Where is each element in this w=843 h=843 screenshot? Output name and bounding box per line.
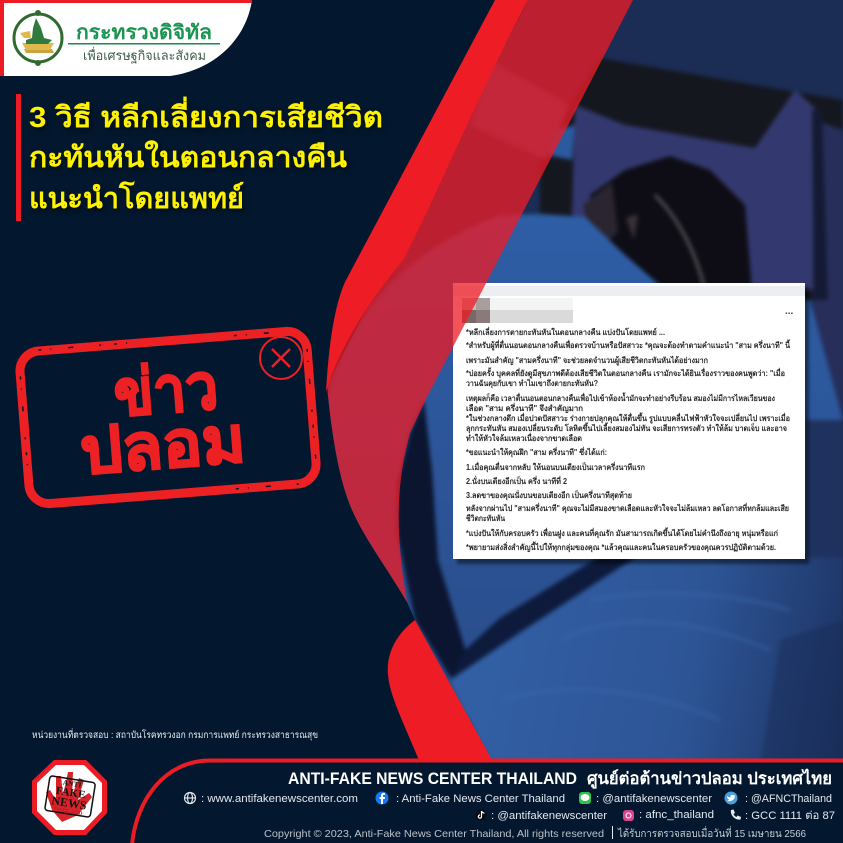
post text: 3.ลดขาของคุณนั่งบนขอบเตียงอีก เป็นครึ่งนาทีสุดท้าย <box>466 489 632 501</box>
post text: *สำหรับผู้ที่ตื่นนอนตอนกลางคืนเพื่อตรวจบ้านหรือปัสสาวะ *คุณจะต้องทำตามคำแนะนำ "สาม ครึ่งนาที" นี้ <box>466 339 791 351</box>
footer heading: ศูนย์ต่อต้านข่าวปลอม ประเทศไทย <box>587 768 832 790</box>
title: 3 วิธี หลีกเลี่ยงการเสียชีวิต <box>29 96 383 134</box>
post text: ลุกกระทันหัน สมองเปลี่ยนระดับ โลหิตขึ้นไปเลี้ยงสมองไม่ทัน จะเสียการทรงตัว ทำให้ล้ม บาดเจ็บ และอาจ <box>466 422 787 434</box>
fake news stamp <box>18 329 318 505</box>
icon: facebook <box>376 792 388 804</box>
post text: *ในช่วงกลางดึก เมื่อปวดปัสสาวะ ร่างกายปลุกคุณให้ตื่นขึ้น รูปแบบคลื่นไฟฟ้าหัวใจจะเปลี่ยนไป เพราะเมื่อ <box>466 412 790 424</box>
contact: website: : www.antifakenewscenter.com <box>201 793 358 805</box>
post text: *บ่อยครั้ง บุคคลที่ยังดูมีสุขภาพดีต้องเสียชีวิตในตอนกลางคืน เรามักจะได้ยินเรื่องราวของคนพูดว่า: "เมื่อ <box>466 367 785 379</box>
post text: ชีวิตกะทันหัน <box>466 513 505 523</box>
icon: cross circle <box>260 337 302 379</box>
blurred profile name <box>462 298 573 323</box>
post text: 2.นั่งบนเตียงอีกเป็น ครึ่ง นาทีที่ 2 <box>466 475 567 486</box>
stamp wear marks <box>18 329 318 505</box>
contact: facebook: : Anti-Fake News Center Thailand <box>396 793 565 805</box>
contact: phone: : GCC 1111 ต่อ 87 <box>745 810 835 822</box>
icon: red hand <box>46 772 92 822</box>
footer heading: ANTI-FAKE NEWS CENTER THAILAND <box>288 770 577 788</box>
title accent bar <box>16 94 21 221</box>
badge label: ANTI <box>62 778 82 790</box>
icon: anti-fake-news octagon badge <box>34 762 104 832</box>
icon: twitter <box>724 792 738 804</box>
stamp text <box>73 348 248 488</box>
badge label: FAKE <box>55 785 86 801</box>
icon: phone <box>731 810 741 820</box>
stamp text: ข่าว <box>111 350 221 430</box>
contact: instagram: : afnc_thailand <box>639 809 714 821</box>
post text: เหตุผลก็คือ เวลาตื่นนอนตอนกลางคืนเพื่อไปเข้าห้องน้ำมักจะทำอย่างรีบร้อน สมองไม่มีการไหลเวียนของ <box>466 392 775 404</box>
post text: วานฉันคุยกับเขา ทำไมเขาถึงตายกะทันหัน? <box>466 378 598 389</box>
post text <box>466 326 791 553</box>
icon: tiktok <box>476 810 486 820</box>
post text: ทำให้หัวใจล้มเหลวเนื่องจากขาดเลือด <box>466 432 582 443</box>
review date: ได้รับการตรวจสอบเมื่อวันที่ 15 เมษายน 2566 <box>617 826 806 840</box>
title: กะทันหันในตอนกลางคืน <box>29 140 347 174</box>
contact: twitter: : @AFNCThailand <box>745 793 832 805</box>
icon: instagram <box>623 810 634 821</box>
post text: 1.เมื่อคุณตื่นจากหลับ ให้นอนบนเตียงเป็นเวลาครึ่งนาทีแรก <box>466 461 645 473</box>
panel: footer <box>132 760 843 843</box>
icon: globe <box>184 792 196 804</box>
post text: เพราะมันสำคัญ "สามครึ่งนาที" จะช่วยลดจำนวนผู้เสียชีวิตกะทันหันได้อย่างมาก <box>466 354 708 366</box>
badge label <box>44 776 96 818</box>
stamp text: ปลอม <box>78 403 248 488</box>
footer heading <box>288 768 832 790</box>
red translucent swoosh <box>327 0 633 602</box>
red lower swoosh <box>388 620 492 760</box>
post text: *แบ่งปันให้กับครอบครัว เพื่อนฝูง และคนที่คุณรัก มันสามารถเกิดขึ้นได้โดยไม่คำนึงถึงอายุ หนุ่มหรือแก่ <box>466 527 778 539</box>
ministry name: กระทรวงดิจิทัล <box>76 22 212 44</box>
post text: เลือด "สาม ครึ่งนาที" จึงสำคัญมาก <box>466 402 583 414</box>
post text: หลังจากผ่านไป "สามครึ่งนาที" คุณจะไม่มีสมองขาดเลือดและหัวใจจะไม่ล้มเหลว ลดโอกาสที่หกล้มและเสีย <box>466 502 789 514</box>
source note: หน่วยงานที่ตรวจสอบ : สถาบันโรคทรวงอก กรมการแพทย์ กระทรวงสาธารณสุข <box>32 728 318 741</box>
icon: ministry emblem <box>14 10 62 66</box>
title <box>29 96 383 215</box>
post text: *ขอแนะนำให้คุณฝึก "สาม ครึ่งนาที" ซึ่งได้แก่: <box>466 446 607 458</box>
icon: line <box>579 792 591 804</box>
photo: person sleeping in bed <box>320 0 843 765</box>
panel: facebook post screenshot <box>453 283 809 564</box>
red bright swoosh band <box>326 0 528 392</box>
title: แนะนำโดยแพทย์ <box>29 180 244 215</box>
badge label: THAILAND <box>53 807 83 817</box>
badge label: NEWS <box>51 793 88 813</box>
panel: ministry logo header <box>0 0 252 76</box>
post text: *พยายามส่งสิ่งสำคัญนี้ไปให้ทุกกลุ่มของคุณ *แล้วคุณและคนในครอบครัวของคุณควรปฏิบัติตามด้วย. <box>466 541 776 553</box>
contact: line: : @antifakenewscenter <box>596 793 712 805</box>
contact: tiktok: : @antifakenewscenter <box>491 810 607 822</box>
post menu dots: ... <box>785 306 794 317</box>
post text: *หลีกเลี่ยงการตายกะทันหันในตอนกลางคืน แบ่งปันโดยแพทย์ ... <box>466 326 665 337</box>
copyright: Copyright © 2023, Anti-Fake News Center Thailand, All rights reserved <box>264 828 604 840</box>
ministry slogan: เพื่อเศรษฐกิจและสังคม <box>83 47 206 64</box>
